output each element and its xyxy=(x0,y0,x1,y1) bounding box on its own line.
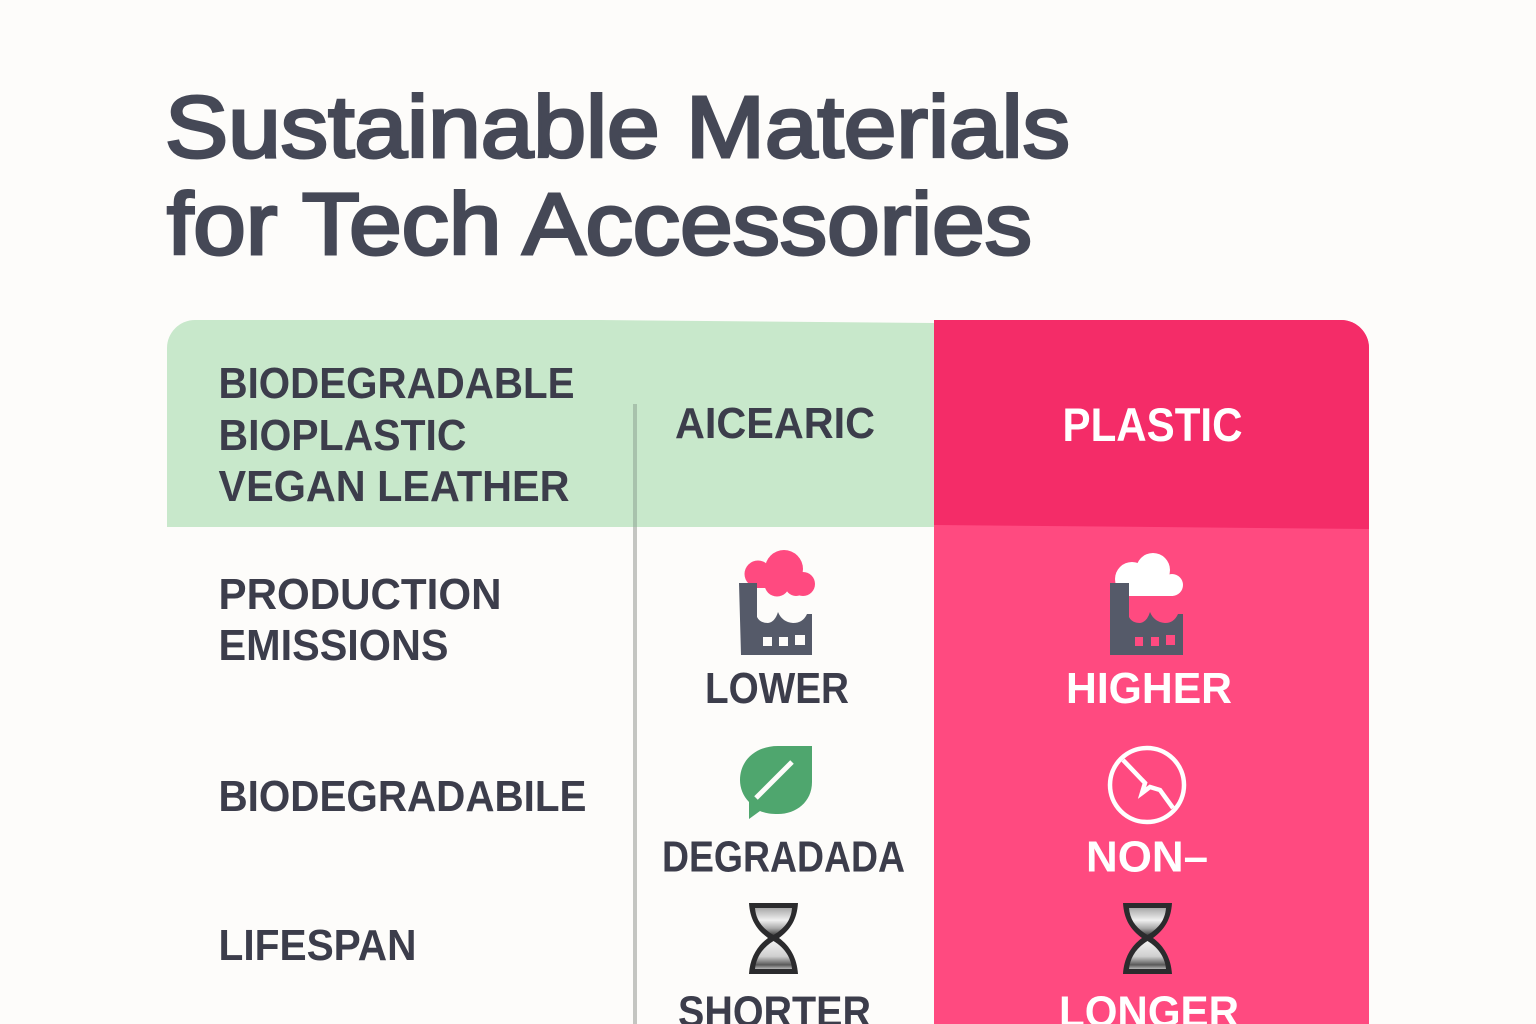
icon: hourglass left xyxy=(749,903,798,974)
heading: aicearic column: AICEARIC xyxy=(675,399,875,448)
heading: material names: BIODEGRADABLE xyxy=(218,359,574,408)
title: Sustainable Materials xyxy=(165,79,1070,176)
row label: production emissions xyxy=(218,570,502,670)
row label: biodegradable: BIODEGRADABILE xyxy=(218,772,586,821)
panel: green header xyxy=(167,320,934,527)
column divider xyxy=(633,404,637,1024)
value: higher: HIGHER xyxy=(1066,664,1232,713)
icon: green leaf xyxy=(740,746,812,819)
title: for Tech Accessories xyxy=(167,176,1032,273)
icon: factory with pink cloud xyxy=(739,550,815,655)
heading: material names: BIOPLASTIC xyxy=(218,411,466,460)
value: lower: LOWER xyxy=(705,664,849,713)
title xyxy=(165,79,1070,273)
row label: lifespan: LIFESPAN xyxy=(218,921,416,970)
heading: material names: VEGAN LEATHER xyxy=(218,462,570,511)
row label: production emissions: PRODUCTION xyxy=(218,570,502,619)
icon: factory with white cloud xyxy=(1110,553,1183,655)
icon: hourglass right xyxy=(1123,903,1172,974)
icon: prohibition sign xyxy=(1110,748,1184,822)
panel: plastic header xyxy=(934,320,1369,529)
heading: plastic column: PLASTIC xyxy=(1062,398,1242,451)
row label: production emissions: EMISSIONS xyxy=(218,621,448,670)
value: non: NON– xyxy=(1086,832,1208,882)
heading: material names xyxy=(218,359,574,511)
panel: plastic column xyxy=(934,320,1369,1024)
value: degradada: DEGRADADA xyxy=(662,832,905,882)
